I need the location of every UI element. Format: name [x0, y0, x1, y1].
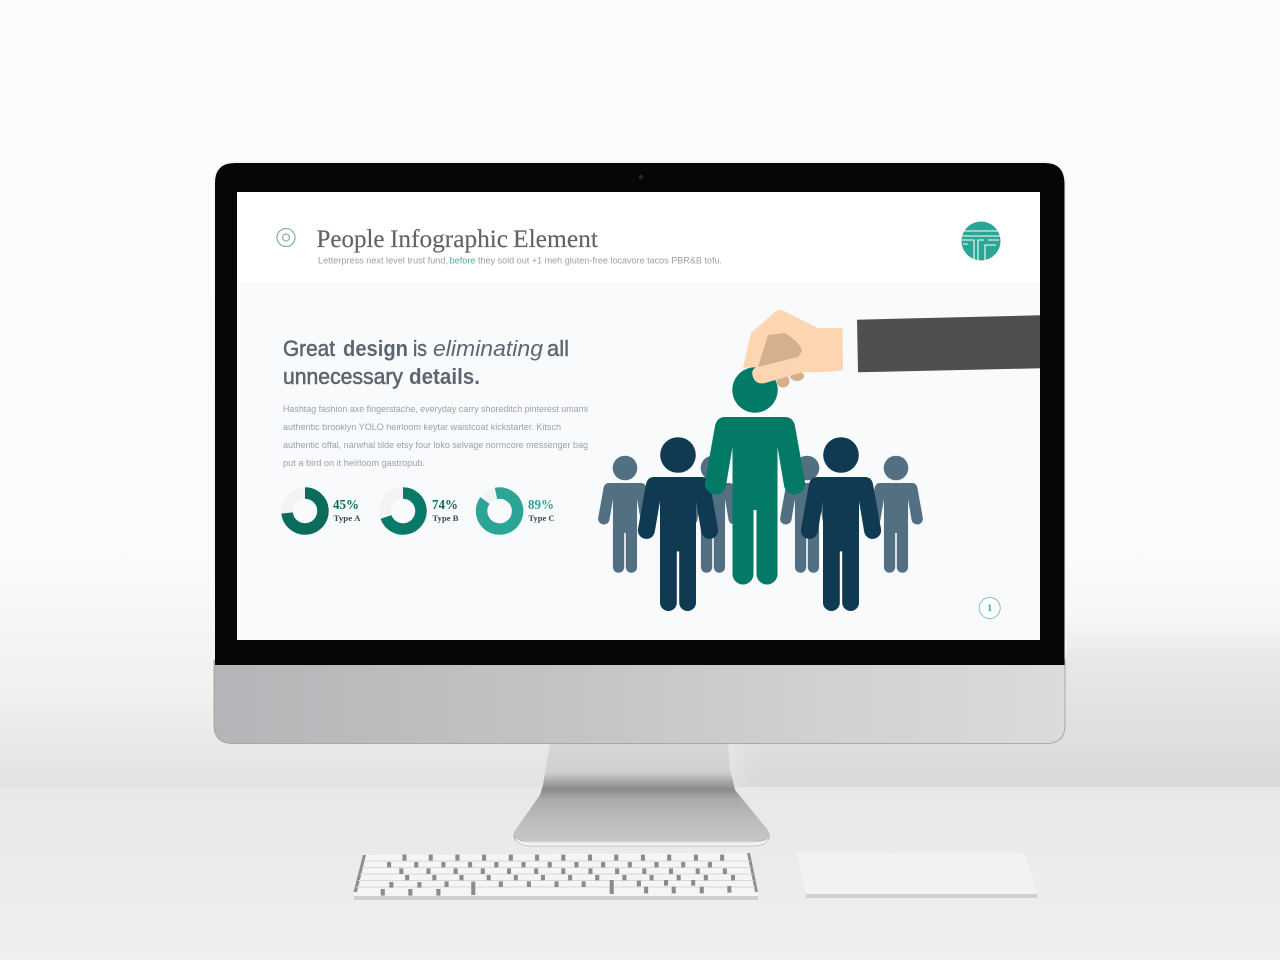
donut chart: Type B: 74% [432, 497, 458, 512]
body text: put a bird on it heirloom gastropub. [283, 458, 425, 468]
hand: shadow [758, 333, 802, 367]
people group [598, 417, 923, 611]
title: Element [513, 224, 598, 253]
headline: all [547, 336, 569, 361]
headline: details. [409, 364, 480, 389]
donut chart: Type C: 89% [528, 497, 554, 512]
subtitle: before [450, 256, 476, 266]
donut chart: Type C: Type C [528, 514, 555, 523]
subtitle [318, 256, 722, 266]
keyboard key rows [356, 861, 755, 887]
hand: palm [743, 310, 843, 383]
headline: unnecessary [283, 364, 403, 389]
headline: Great [283, 336, 335, 361]
donut chart: Type C [482, 493, 555, 529]
donut chart: Type A: Type A [334, 514, 361, 523]
page number: 1 [987, 603, 992, 613]
donut chart: Type B [385, 493, 459, 529]
person: navy left [638, 437, 718, 611]
headline: eliminating [433, 336, 544, 361]
person: grey far left [598, 456, 652, 573]
keyboard [354, 853, 758, 900]
trackpad [797, 853, 1037, 898]
subtitle: Letterpress next level trust fund, [318, 256, 448, 266]
person: navy right [801, 437, 881, 611]
keyboard edges [354, 853, 758, 892]
monitor [213, 161, 1067, 744]
camera [639, 175, 643, 179]
keyboard key gaps [381, 855, 735, 896]
screen: content area [237, 192, 1040, 640]
icon: title bullet ring [277, 228, 295, 246]
title: Infographic [390, 224, 508, 253]
title [316, 224, 598, 253]
donut chart: Type B: Type B [432, 514, 459, 523]
page number [979, 598, 1000, 618]
subtitle: they sold out +1 meh gluten-free locavore tacos PBR&B tofu. [478, 256, 722, 266]
body text: Hashtag fashion axe fingerstache, everyday carry shoreditch pinterest umami [283, 404, 588, 414]
headline [283, 336, 569, 389]
headline: is [413, 336, 427, 361]
jacket sleeve [857, 315, 1040, 372]
headline: design [343, 336, 408, 361]
icon: logo [962, 222, 1000, 261]
title: People [316, 224, 384, 253]
keyboard body [354, 853, 758, 898]
body text: authentic brooklyn YOLO heirloom keytar waistcoat kickstarter. Kitsch [283, 422, 561, 432]
green person head [732, 367, 778, 413]
illustration: hand placing head [732, 310, 1040, 413]
body text [283, 404, 588, 468]
person: grey inner right [780, 456, 834, 573]
screen: header band [237, 192, 1040, 282]
background: desk [0, 787, 1280, 960]
monitor bezel [215, 163, 1064, 665]
hand: curled fingers [776, 371, 804, 388]
person: grey inner left [686, 456, 740, 573]
person: grey far right [869, 456, 923, 573]
donut chart: Type A [287, 493, 361, 529]
body text: authentic offal, narwhal tilde etsy four loko selvage normcore messenger bag [283, 440, 588, 450]
person: green body [705, 417, 805, 584]
donut chart: Type A: 45% [333, 497, 359, 512]
wall shading to the right [740, 640, 1280, 810]
monitor glow edge [213, 161, 1067, 671]
monitor stand [513, 743, 770, 846]
monitor chin [214, 660, 1065, 744]
base lip [514, 836, 770, 846]
